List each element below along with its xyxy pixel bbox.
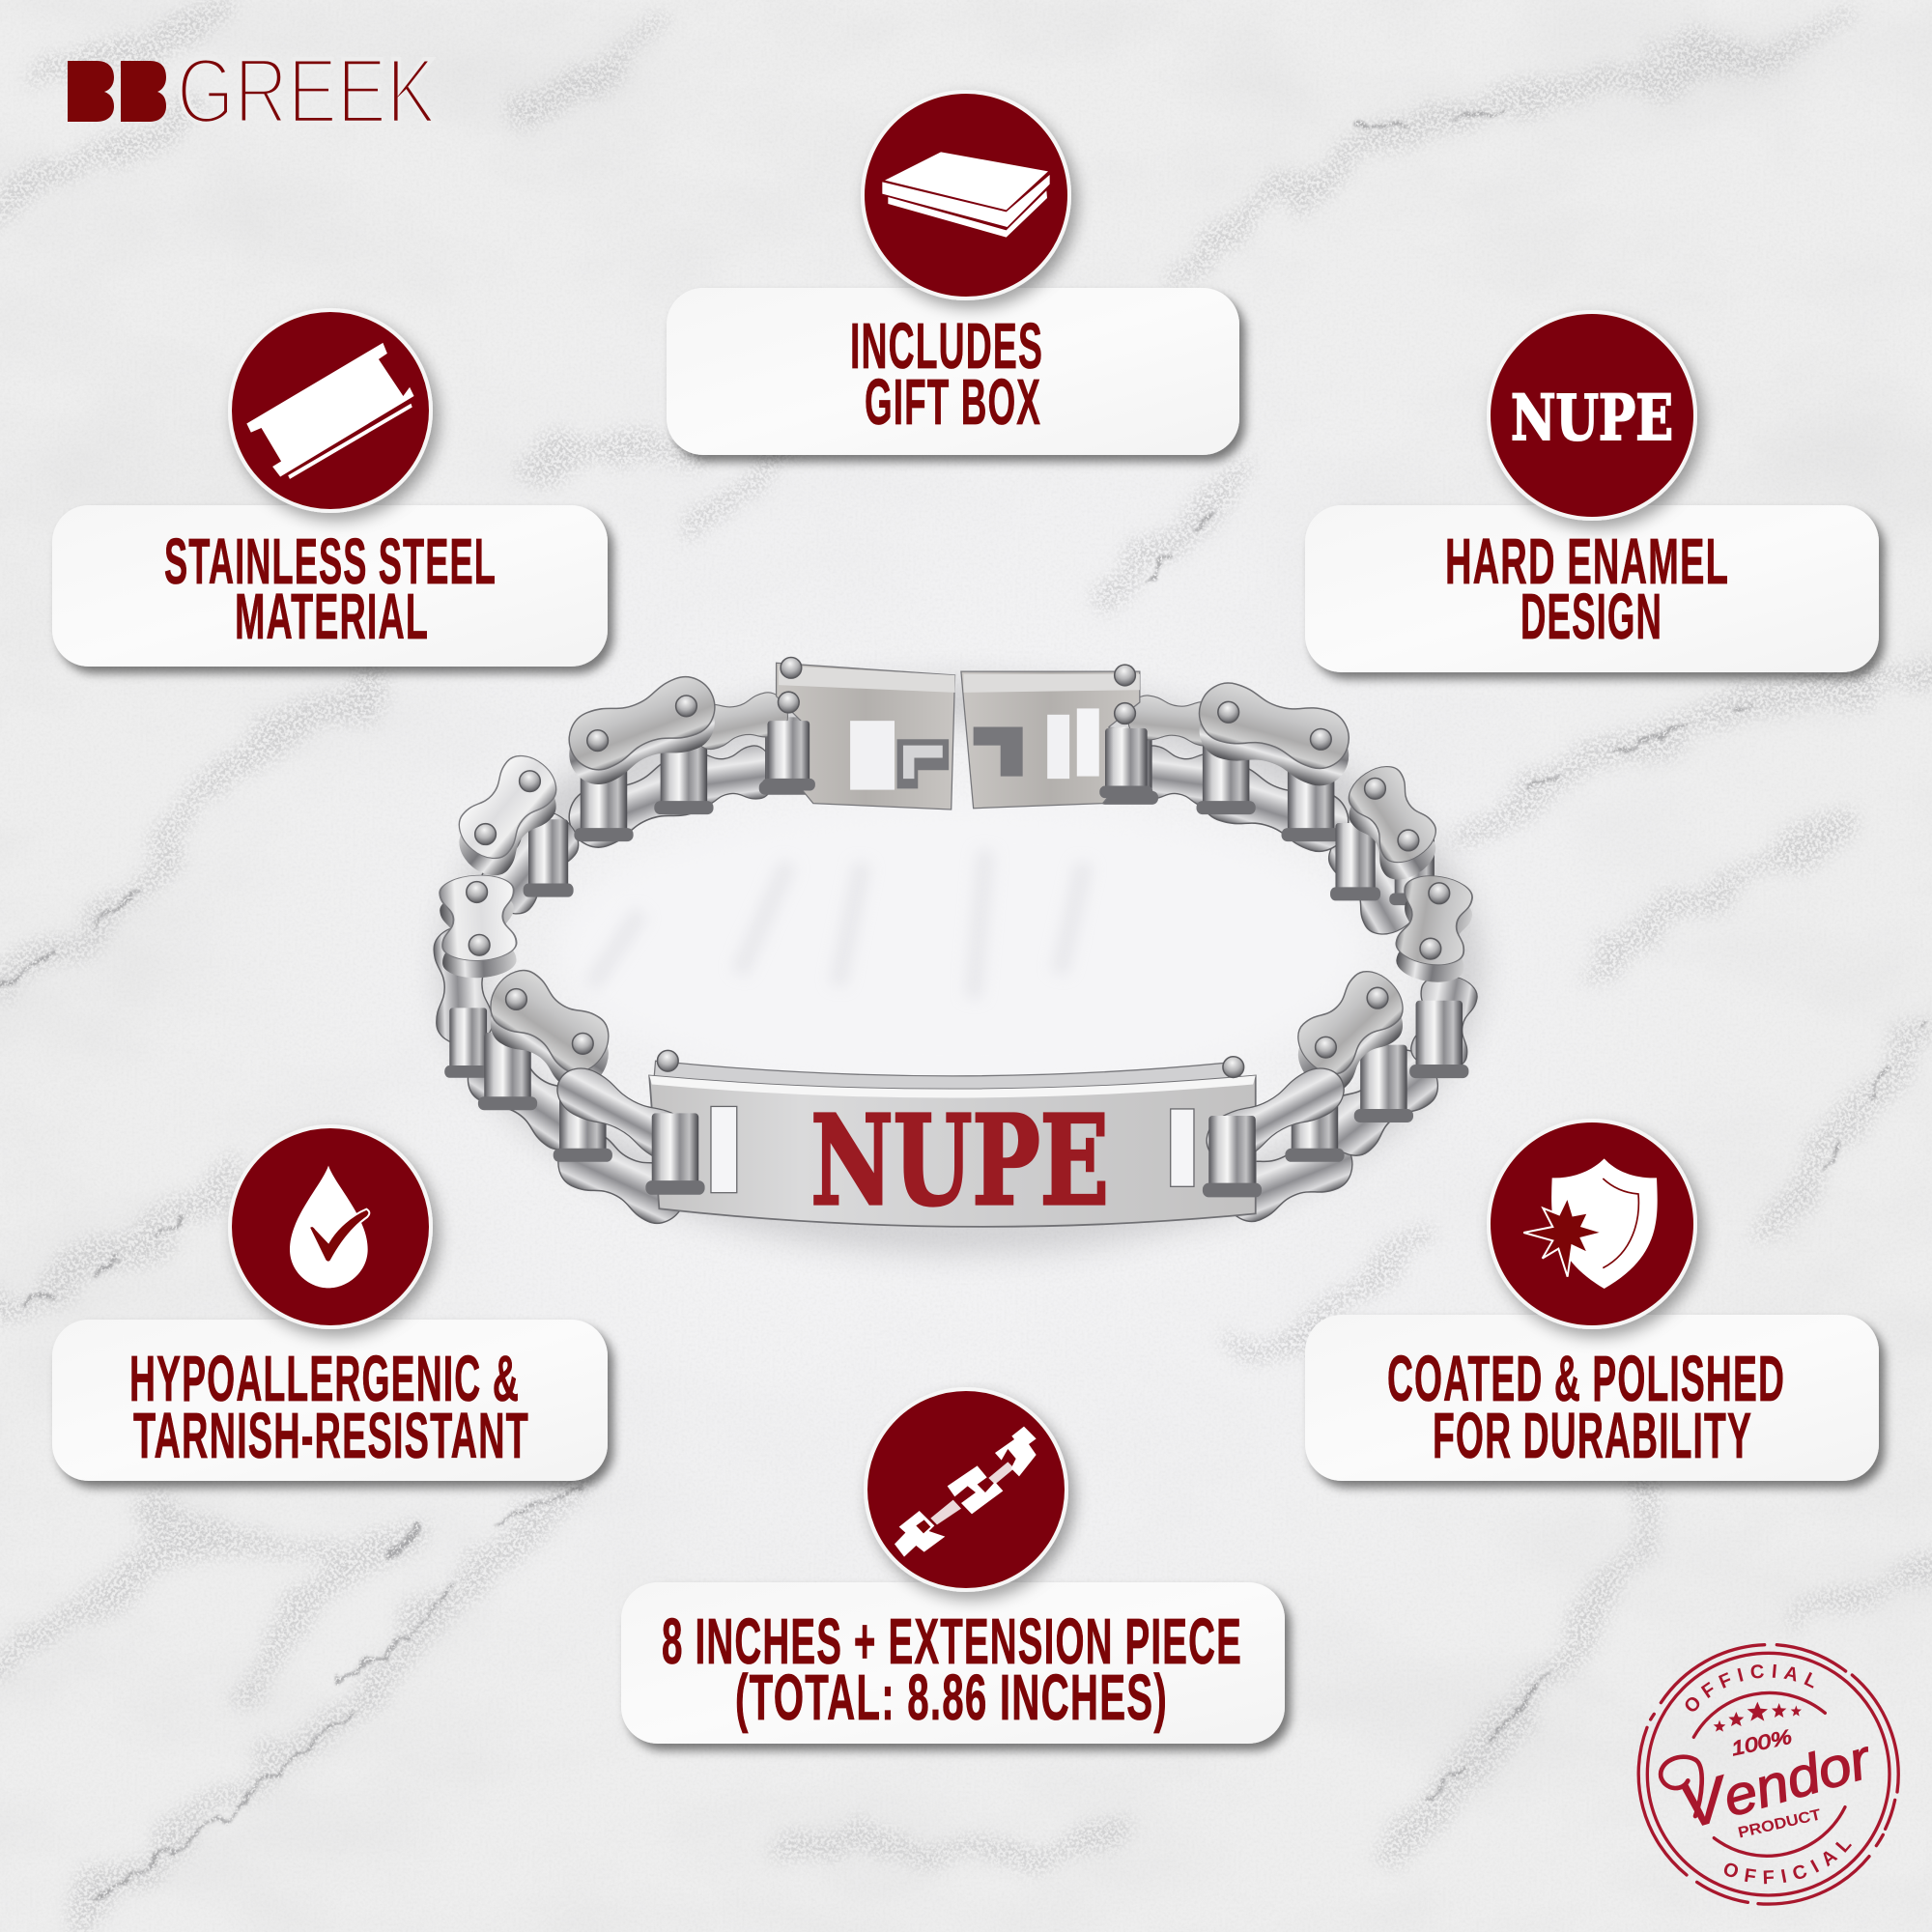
icon: chain links (866, 1389, 1066, 1590)
chain upper plates (439, 668, 1475, 1101)
panel: stainless steel (52, 310, 608, 667)
icon: drop with check (230, 1126, 431, 1327)
label: includes gift box (850, 310, 1043, 439)
label: 8 inches plus extension piece (662, 1605, 1242, 1734)
chain rivets (467, 657, 1450, 1077)
label: 8 inches plus extension piece: (TOTAL: 8.86 INCHES) (735, 1662, 1168, 1734)
panel: length (621, 1389, 1285, 1744)
label: includes gift box: GIFT BOX (865, 366, 1041, 439)
icon: shield (1489, 1121, 1695, 1327)
label: hard enamel design: DESIGN (1520, 581, 1662, 653)
icon: steel plate (230, 310, 431, 511)
icon: gift box (863, 92, 1069, 298)
label: stainless steel material: STAINLESS STEEL (164, 526, 497, 598)
badge lettering: Vendor (1673, 1723, 1880, 1842)
label: 8 inches plus extension piece: 8 INCHES + EXTENSION PIECE (662, 1605, 1242, 1678)
panel: gift box (667, 92, 1239, 455)
clasp (762, 663, 1152, 810)
label: hypoallergenic and tarnish-resistant: HYPOALLERGENIC & (129, 1343, 520, 1415)
label: includes gift box: INCLUDES (850, 310, 1043, 383)
chain rollers (444, 717, 1468, 1162)
badge lettering: 100% (1729, 1726, 1794, 1760)
label: hard enamel design: HARD ENAMEL (1445, 526, 1729, 598)
label: stainless steel material (164, 526, 497, 653)
icon: NUPE letters: NUPE (1511, 382, 1673, 455)
engraved NUPE text: NUPE (810, 1089, 1109, 1234)
badge lettering: OFFICIAL (1723, 1841, 1852, 1884)
badge: official 100% vendor product (1636, 1643, 1900, 1906)
ID plate with NUPE (549, 1050, 1352, 1234)
logo: BB GREEK: GREEK (177, 40, 436, 143)
label: stainless steel material: MATERIAL (235, 581, 429, 653)
badge lettering (1673, 1663, 1880, 1884)
logo: BB GREEK (68, 40, 436, 143)
bracelet photo (433, 657, 1480, 1234)
label: hard enamel design (1445, 526, 1729, 653)
badge lettering: OFFICIAL (1685, 1663, 1814, 1712)
panel: coated and polished (1305, 1121, 1879, 1481)
badge stars (1714, 1702, 1802, 1732)
panel: hard enamel (1305, 312, 1879, 672)
bracelet shadow and reflective centre (462, 702, 1460, 1233)
back chain plates (433, 743, 1480, 1232)
label: hypoallergenic and tarnish-resistant: TARNISH-RESISTANT (133, 1400, 529, 1472)
panel: hypoallergenic (52, 1126, 608, 1481)
badge rings (1638, 1645, 1898, 1904)
icon: NUPE letters (1489, 312, 1695, 519)
label: coated and polished for durability (1387, 1343, 1785, 1472)
badge lettering: PRODUCT (1737, 1806, 1823, 1842)
label: hypoallergenic and tarnish-resistant (129, 1343, 529, 1472)
